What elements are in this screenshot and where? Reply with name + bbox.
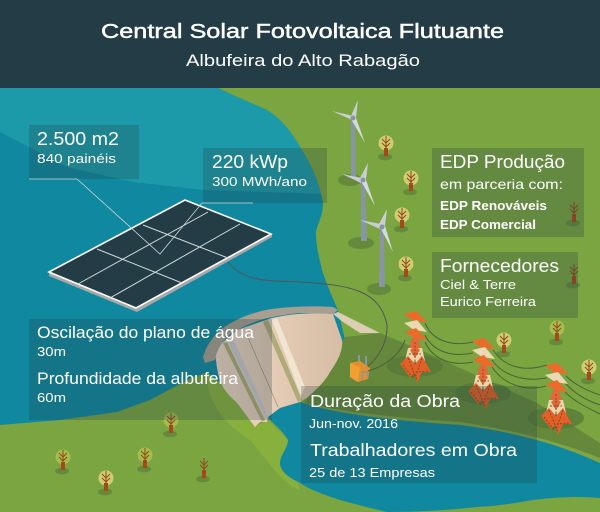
panel: EDP: EDP Produção xyxy=(440,152,565,172)
icon: tree xyxy=(55,450,70,474)
wind turbines xyxy=(332,100,393,295)
dam xyxy=(203,306,380,427)
panel: works xyxy=(301,386,537,483)
dam stripes xyxy=(223,318,305,422)
callout lines xyxy=(29,179,253,254)
dam face xyxy=(216,313,342,427)
pylon 1 xyxy=(387,311,443,383)
pylon 2 xyxy=(455,338,511,410)
icon: tree xyxy=(403,170,418,195)
panel: works: 25 de 13 Empresas xyxy=(309,465,436,480)
panel: reservoir xyxy=(29,319,272,420)
power lines xyxy=(425,323,600,414)
panel: works: Trabalhadores em Obra xyxy=(310,440,517,460)
panel: EDP: EDP Renováveis xyxy=(440,198,547,213)
panel: reservoir: 60m xyxy=(37,390,66,405)
icon: tree xyxy=(566,202,580,226)
dam right abutment xyxy=(333,312,380,333)
icon: tree xyxy=(378,136,394,160)
floating solar panel array xyxy=(49,200,272,312)
panel: power: 220 kWp xyxy=(212,152,288,172)
pylon 3 xyxy=(528,363,584,435)
icon: tree xyxy=(98,470,114,495)
panel: EDP: em parceria com: xyxy=(440,176,563,192)
panel: works: Duração da Obra xyxy=(310,391,460,411)
cable from panels to transformer xyxy=(228,262,387,372)
panel: power xyxy=(203,148,327,203)
icon: tree xyxy=(566,264,580,288)
wind turbine 3 xyxy=(360,209,393,295)
panel: works: Jun-nov. 2016 xyxy=(309,416,398,431)
panel: area: 2.500 m2 xyxy=(37,129,119,149)
icon: tree xyxy=(581,360,596,384)
panel: EDP: EDP Comercial xyxy=(440,217,536,232)
panel: suppliers: Eurico Ferreira xyxy=(440,294,537,309)
dam crest xyxy=(203,306,338,363)
icon: tree xyxy=(196,458,210,482)
panel: reservoir: 30m xyxy=(37,344,66,359)
panel: reservoir: Profundidade da albufeira xyxy=(37,370,239,388)
panel: suppliers xyxy=(432,252,578,318)
wind turbine 2 xyxy=(342,163,375,249)
icon: tree xyxy=(496,332,512,357)
panel: power: 300 MWh/ano xyxy=(212,174,307,189)
panel: EDP xyxy=(432,148,584,237)
panel: area: 840 painéis xyxy=(37,151,117,166)
icon: tree xyxy=(137,448,152,472)
panel: reservoir: Oscilação do plano de água xyxy=(37,324,255,342)
wind turbine 1 xyxy=(332,100,365,186)
panel: suppliers: Fornecedores xyxy=(440,256,559,276)
dark header band xyxy=(0,0,600,88)
icon: tree xyxy=(394,208,410,232)
icon: tree xyxy=(398,256,414,281)
transformer xyxy=(345,355,370,382)
panel: suppliers: Ciel & Terre xyxy=(440,277,516,292)
panel: area xyxy=(29,125,139,179)
icon: tree xyxy=(549,320,564,345)
icon: tree xyxy=(163,412,178,437)
subtitle: Albufeira do Alto Rabagão xyxy=(186,51,420,70)
cables from transformer to pylon xyxy=(368,340,405,371)
title: Central Solar Fotovoltaica Flutuante xyxy=(101,21,504,43)
